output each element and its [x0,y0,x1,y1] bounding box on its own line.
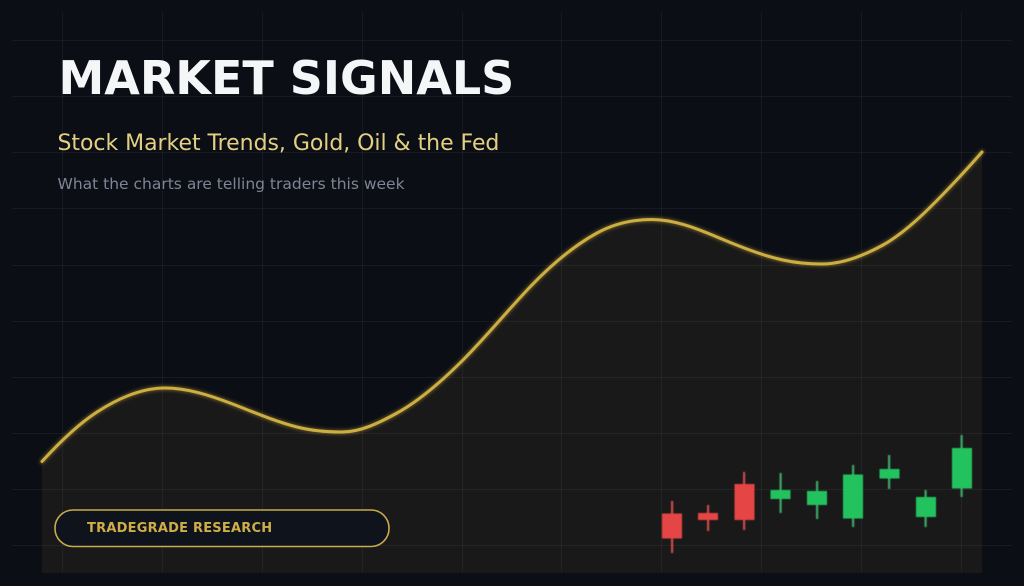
candle 6 bullish [843,465,863,527]
candlestick chart [662,435,972,553]
candle 7 bullish [880,455,900,489]
candle 1 bearish [662,501,682,553]
candle 3 bearish [734,472,754,530]
area fill under price line [42,152,982,573]
title: MARKET SIGNALS [58,51,514,105]
candle 5 bullish [807,481,827,519]
candle 9 bullish [952,435,972,497]
candle 4 bullish [770,473,790,513]
badge: TradeGrade Research [55,510,389,546]
candle 8 bullish [916,490,936,527]
badge: TradeGrade Research: TRADEGRADE RESEARCH [87,521,272,536]
candle 2 bearish [698,505,718,531]
price trend line [42,152,982,462]
tagline: What the charts are telling traders this week [58,175,405,193]
subtitle: Stock Market Trends, Gold, Oil & the Fed [58,131,499,156]
